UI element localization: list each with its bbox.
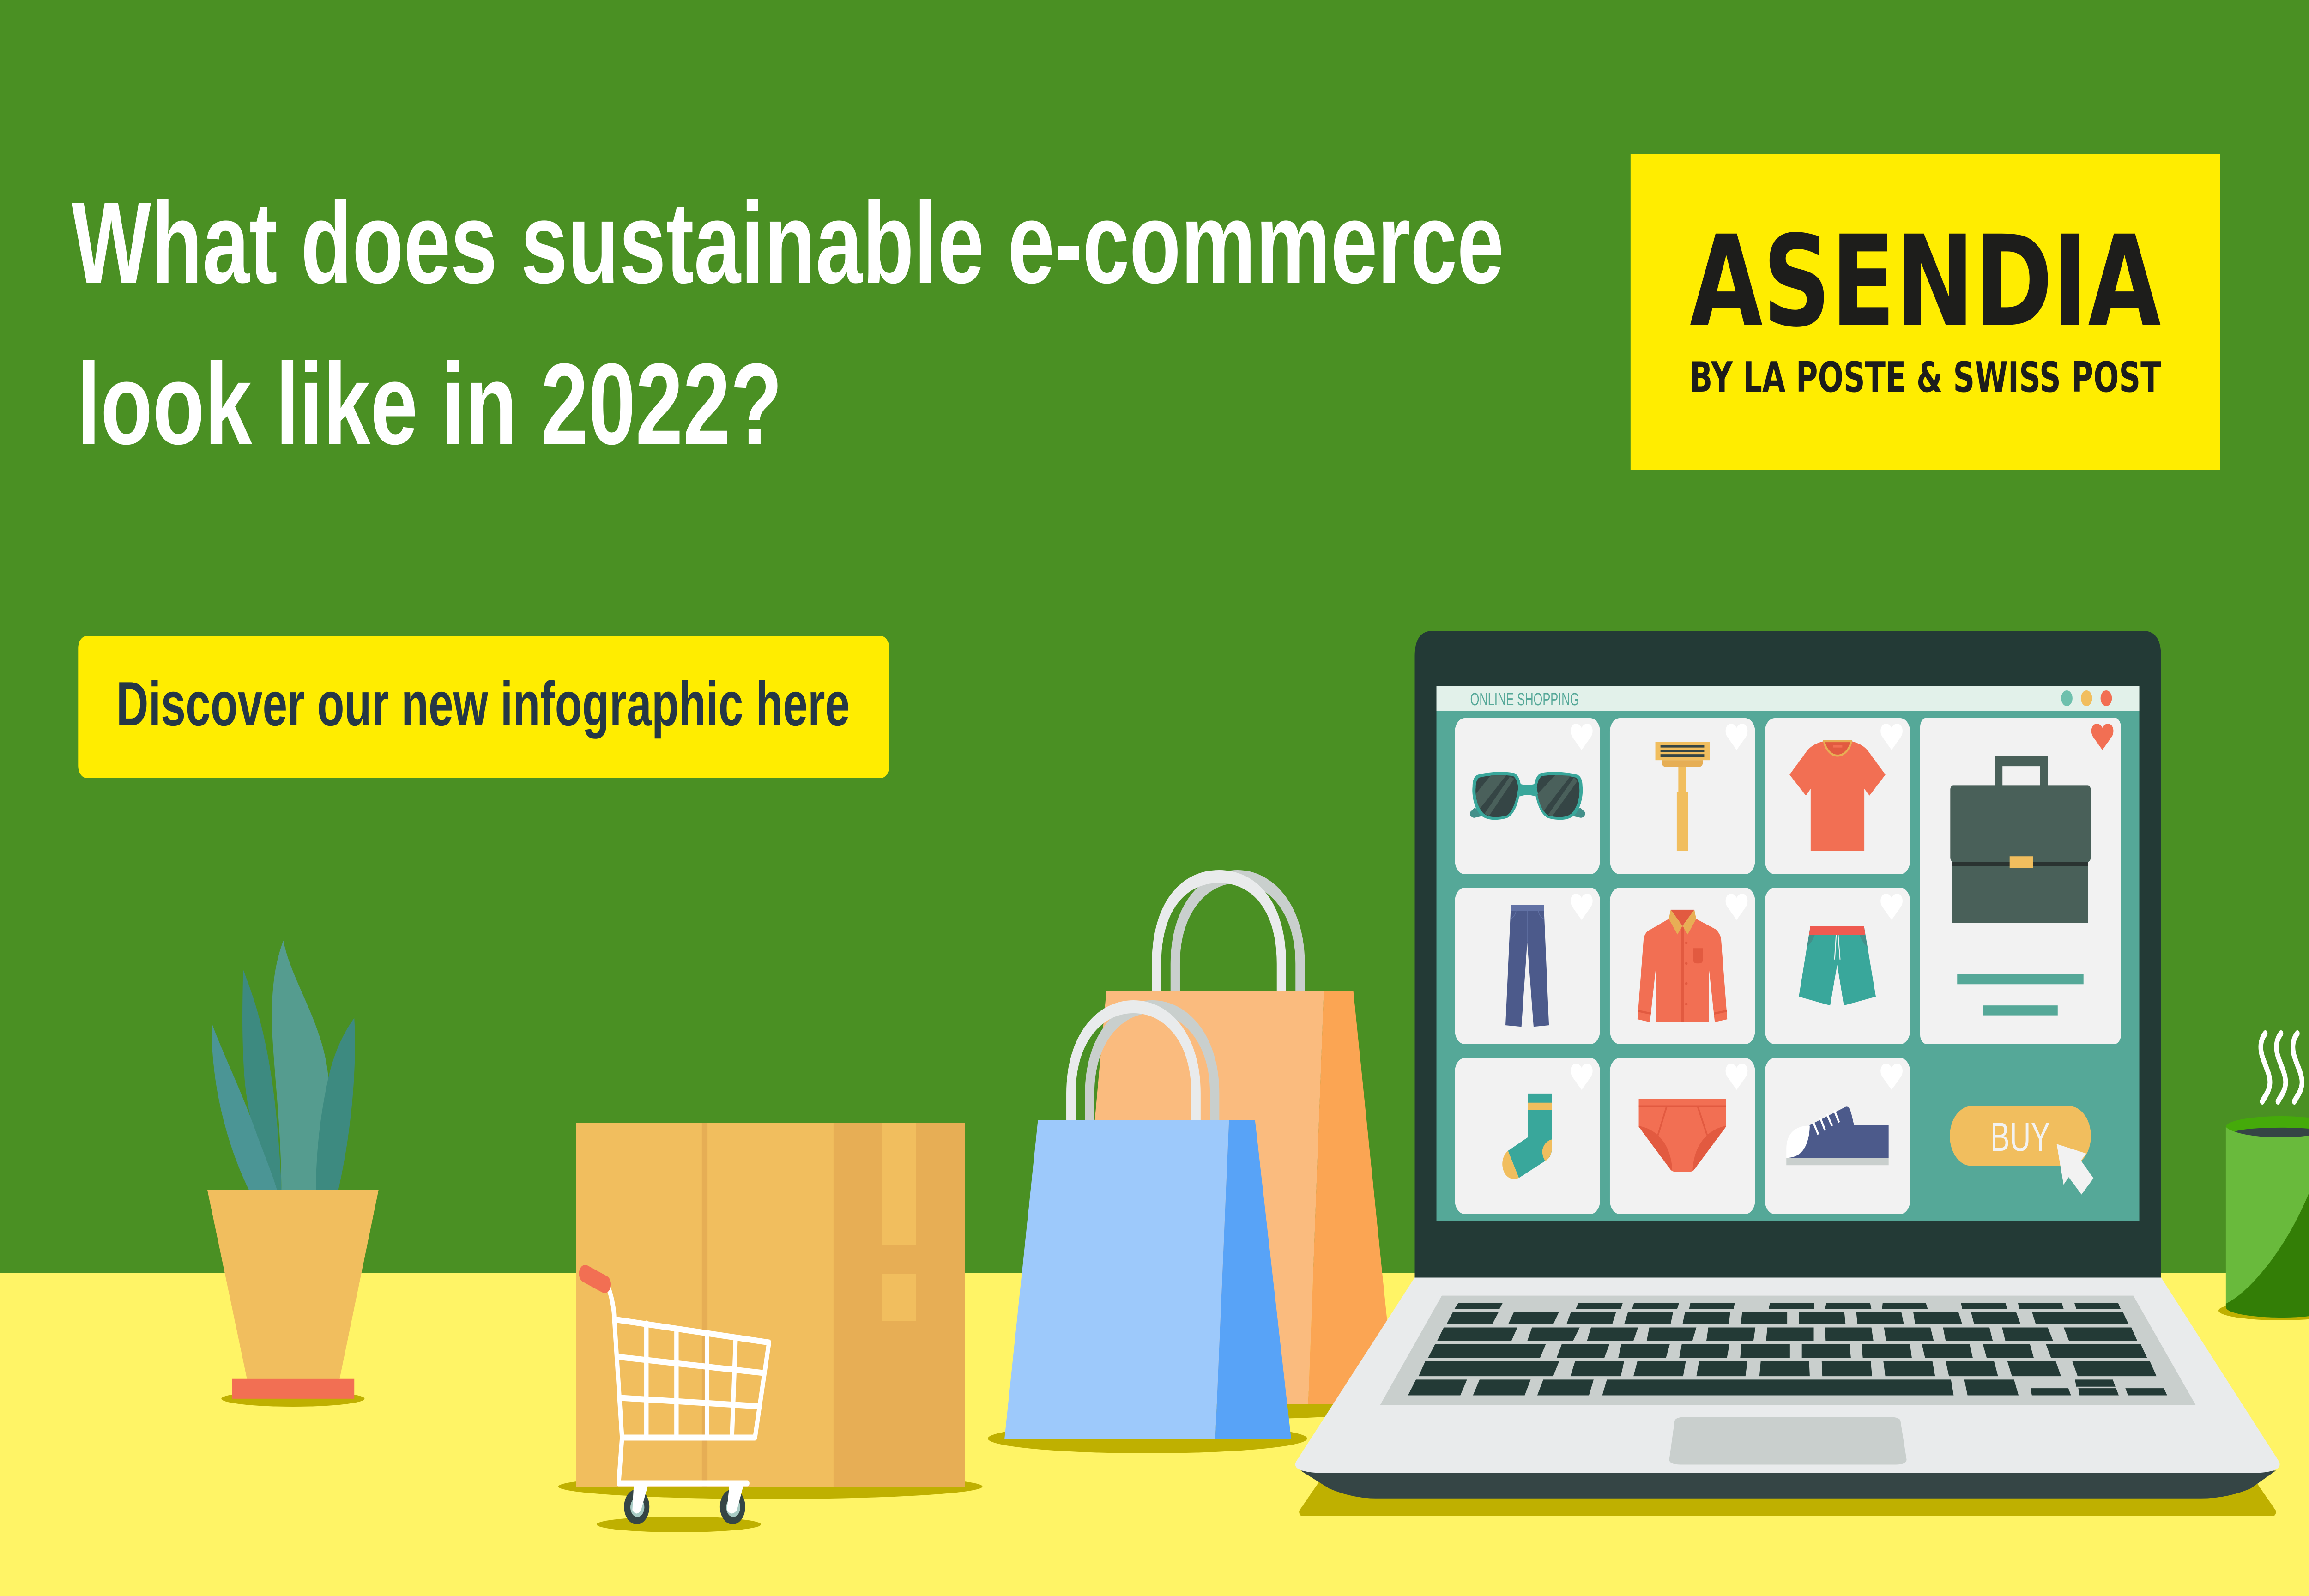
blue shopping bag bbox=[988, 1007, 1307, 1453]
icon: sneaker bbox=[1786, 1106, 1889, 1165]
browser header bar bbox=[1437, 686, 2140, 711]
plant in pot bbox=[207, 941, 379, 1407]
icon: trousers bbox=[1505, 905, 1549, 1027]
laptop lid bbox=[1415, 631, 2161, 1279]
laptop screen bbox=[1437, 686, 2140, 1221]
buy label: BUY bbox=[1990, 1114, 2050, 1160]
title: look like in 2022? bbox=[77, 339, 782, 469]
trackpad bbox=[1669, 1417, 1907, 1464]
cardboard box bbox=[558, 1123, 982, 1499]
icon: briefcase bbox=[1950, 756, 2091, 923]
icon: t-shirt bbox=[1789, 741, 1886, 851]
icon: briefs bbox=[1639, 1099, 1726, 1172]
icon: sunglasses bbox=[1470, 772, 1585, 820]
keyboard keys bbox=[1408, 1303, 2167, 1396]
laptop bbox=[1295, 631, 2280, 1516]
call to action button: Discover our new infographic here bbox=[116, 670, 850, 739]
call to action button bbox=[78, 636, 889, 778]
logo tagline: BY LA POSTE & SWISS POST bbox=[1690, 353, 2161, 402]
icon: shirt bbox=[1638, 910, 1727, 1022]
featured briefcase and buy button bbox=[1950, 756, 2091, 1166]
laptop base bbox=[1295, 1278, 2280, 1499]
icon: shorts bbox=[1799, 926, 1876, 1005]
icon: razor bbox=[1656, 742, 1710, 851]
product text placeholder bars bbox=[1957, 974, 2084, 1016]
yellow desk bbox=[0, 1273, 2309, 1596]
shopping cart bbox=[585, 1274, 769, 1532]
steam bbox=[2261, 1034, 2302, 1101]
laptop shadow bbox=[1299, 1482, 2276, 1516]
icon: mouse cursor bbox=[2057, 1144, 2093, 1195]
product cards bbox=[1455, 718, 2121, 1214]
product icons bbox=[1470, 741, 1889, 1179]
coffee mug with steam bbox=[2218, 1034, 2309, 1320]
title bbox=[72, 178, 1504, 469]
logo wordmark: ASENDIA bbox=[1690, 209, 2161, 355]
title: What does sustainable e-commerce bbox=[72, 178, 1504, 308]
browser header bar: ONLINE SHOPPING bbox=[1470, 690, 1579, 709]
buy button pill bbox=[1950, 1106, 2091, 1166]
icon: sock bbox=[1502, 1094, 1552, 1179]
orange shopping bag bbox=[1069, 877, 1403, 1419]
green wall background bbox=[0, 0, 2309, 1273]
logo panel: Asendia bbox=[1631, 154, 2220, 470]
favourite hearts bbox=[1571, 724, 2113, 1090]
